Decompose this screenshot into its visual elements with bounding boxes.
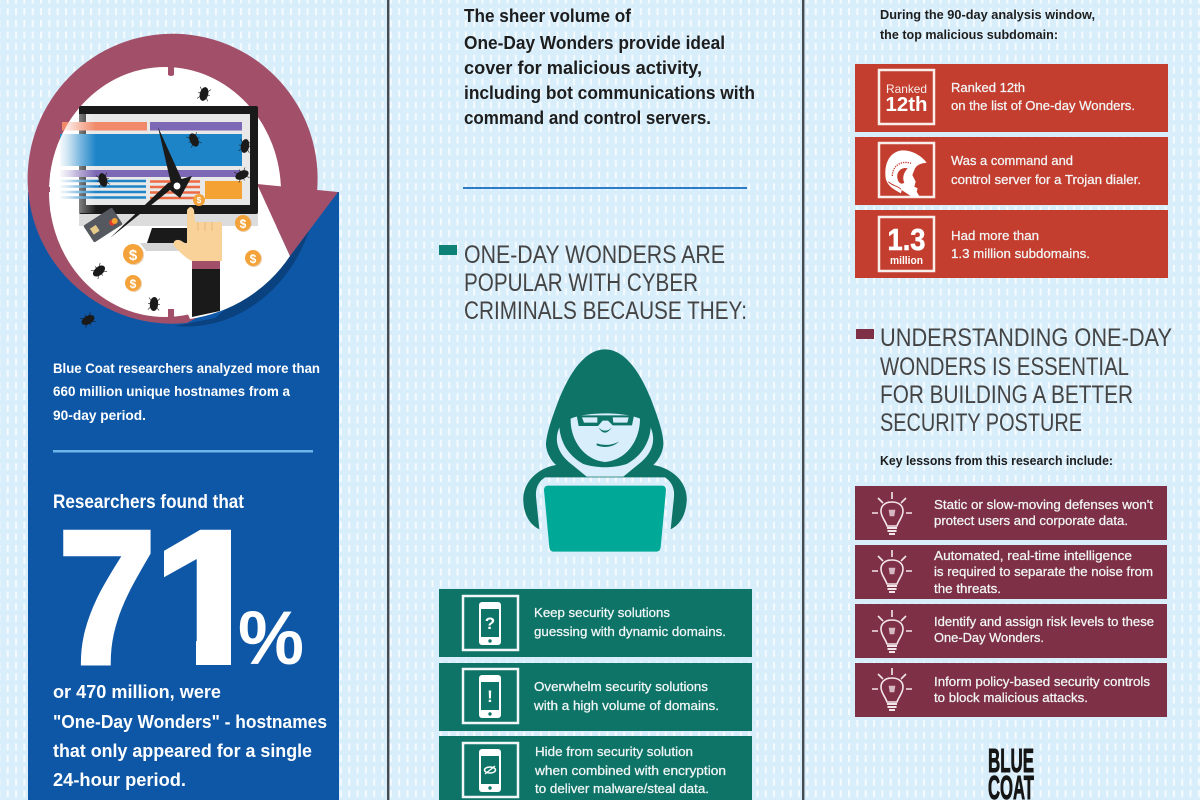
heading: understanding one-day wonders (856, 324, 1172, 437)
item: 1.3 million subdomains: 1.3 (888, 222, 926, 257)
bugs (79, 86, 252, 329)
lesson: assign risk levels: One-Day Wonders. (934, 630, 1044, 645)
lesson: policy controls: to block malicious attacks. (934, 690, 1088, 705)
heading: one-day wonders popular with cyber criminals (439, 241, 747, 325)
text: one-day wonders definition: or 470 million, were (53, 682, 221, 702)
illustration: clock ring around hacked monitor (28, 34, 338, 329)
item: overwhelm: ! (487, 687, 493, 706)
text: analysis intro: 90-day period. (53, 407, 146, 423)
coins: $ (240, 217, 247, 231)
monitor (50, 106, 258, 251)
lesson: static defenses: protect users and corporate data. (934, 513, 1128, 528)
text: sheer volume statement (464, 6, 755, 128)
item: overwhelm (439, 663, 752, 731)
item: 1.3 million subdomains (855, 210, 1168, 278)
item: trojan dialer: Was a command and (951, 153, 1073, 168)
heading: one-day wonders popular with cyber criminals: ONE-DAY WONDERS ARE (464, 241, 725, 269)
text: analysis intro: 660 million unique hostnames from a (53, 383, 290, 399)
text: researchers found that: Researchers found that (53, 492, 245, 513)
lesson: assign risk levels: Identify and assign risk levels to these (934, 614, 1154, 629)
big statistic 71 percent (63, 530, 302, 666)
icon: trojan helmet (885, 150, 927, 197)
big statistic 71 percent: 1 (150, 492, 268, 704)
item: keep guessing: guessing with dynamic domains. (534, 624, 726, 639)
item: hide with encryption (439, 736, 752, 800)
lesson: policy controls: Inform policy-based security controls (934, 674, 1150, 689)
lesson: static defenses: Static or slow-moving defenses won't (934, 497, 1153, 512)
item: keep guessing: ? (485, 614, 495, 633)
lesson: automated intelligence: Automated, real-time intelligence (934, 548, 1132, 563)
item: 1.3 million subdomains: 1.3 million subdomains. (951, 246, 1090, 261)
text: one-day wonders definition: 24-hour period. (53, 770, 186, 790)
icon: hooded hacker with laptop (523, 349, 687, 552)
text: key lessons intro: Key lessons from this research include: (880, 454, 1113, 468)
logo: Blue Coat (988, 742, 1034, 800)
item: 1.3 million subdomains: Had more than (951, 228, 1039, 243)
item: keep guessing (439, 589, 752, 657)
item: ranked 12th: on the list of One-day Wonders. (951, 98, 1135, 113)
lesson: policy controls (855, 663, 1167, 717)
text: sheer volume statement: cover for malicious activity, (464, 58, 702, 78)
text: sheer volume statement: including bot communications with (464, 83, 755, 103)
item: 1.3 million subdomains: million (890, 255, 923, 267)
heading: understanding one-day wonders: SECURITY POSTURE (880, 409, 1082, 437)
lesson: static defenses (855, 486, 1167, 540)
panel: red subdomain facts (855, 64, 1168, 278)
text: 90-day analysis window intro (880, 8, 1095, 42)
lesson: automated intelligence: the threats. (934, 581, 1001, 596)
text: one-day wonders definition: "One-Day Wonders" - hostnames (53, 712, 327, 732)
heading: one-day wonders popular with cyber criminals: CRIMINALS BECAUSE THEY: (464, 297, 747, 325)
item: hide with encryption: to deliver malware/steal data. (535, 781, 709, 796)
item: ranked 12th: Ranked 12th (951, 80, 1025, 95)
big statistic 71 percent: 7 (58, 492, 156, 704)
big statistic 71 percent: % (238, 596, 304, 681)
logo: Blue Coat: BLUE (988, 742, 1034, 779)
credit card (83, 207, 123, 243)
item: trojan dialer: control server for a Trojan dialer. (951, 172, 1141, 187)
item: overwhelm: Overwhelm security solutions (534, 679, 709, 694)
maroon clock ring (28, 34, 318, 324)
text: one-day wonders definition: that only appeared for a single (53, 741, 312, 761)
heading: understanding one-day wonders: WONDERS IS ESSENTIAL (880, 353, 1129, 381)
item: ranked 12th: Ranked (886, 82, 927, 96)
heading: understanding one-day wonders: FOR BUILDING A BETTER (880, 381, 1133, 409)
clock hands (110, 127, 192, 238)
panel: blue statistics panel (28, 34, 339, 800)
coins (123, 194, 262, 292)
item: ranked 12th: 12th (886, 94, 928, 116)
lesson: automated intelligence (855, 545, 1167, 599)
text: sheer volume statement: The sheer volume of (464, 6, 632, 26)
item: ranked 12th (855, 64, 1168, 132)
text: sheer volume statement: One-Day Wonders provide ideal (464, 33, 725, 53)
panel: maroon key lessons (855, 486, 1167, 717)
hand pressing screen (174, 207, 222, 317)
heading: one-day wonders popular with cyber criminals: POPULAR WITH CYBER (464, 269, 698, 297)
item: overwhelm: with a high volume of domains. (533, 698, 719, 713)
coins: $ (130, 277, 137, 291)
item: trojan dialer (855, 137, 1168, 205)
item: keep guessing: Keep security solutions (534, 605, 671, 620)
clock ticks (48, 67, 174, 318)
arrow head (257, 184, 338, 256)
text: 90-day analysis window intro: the top malicious subdomain: (880, 28, 1058, 42)
item: hide with encryption: Hide from security solution (535, 744, 693, 759)
text: analysis intro (53, 360, 320, 423)
coins: $ (197, 196, 202, 205)
lesson: assign risk levels (855, 604, 1167, 658)
white clock face (49, 67, 290, 319)
panel: teal tactics list (439, 589, 752, 800)
lesson: automated intelligence: is required to separate the noise from (934, 564, 1153, 579)
text: 90-day analysis window intro: During the 90-day analysis window, (880, 8, 1095, 22)
text: one-day wonders definition (53, 682, 327, 790)
item: hide with encryption: when combined with encryption (534, 763, 726, 778)
text: sheer volume statement: command and control servers. (464, 108, 711, 128)
text: analysis intro: Blue Coat researchers analyzed more than (53, 360, 320, 376)
ring shadow (175, 228, 310, 327)
coins: $ (129, 247, 138, 264)
coins: $ (250, 252, 257, 266)
